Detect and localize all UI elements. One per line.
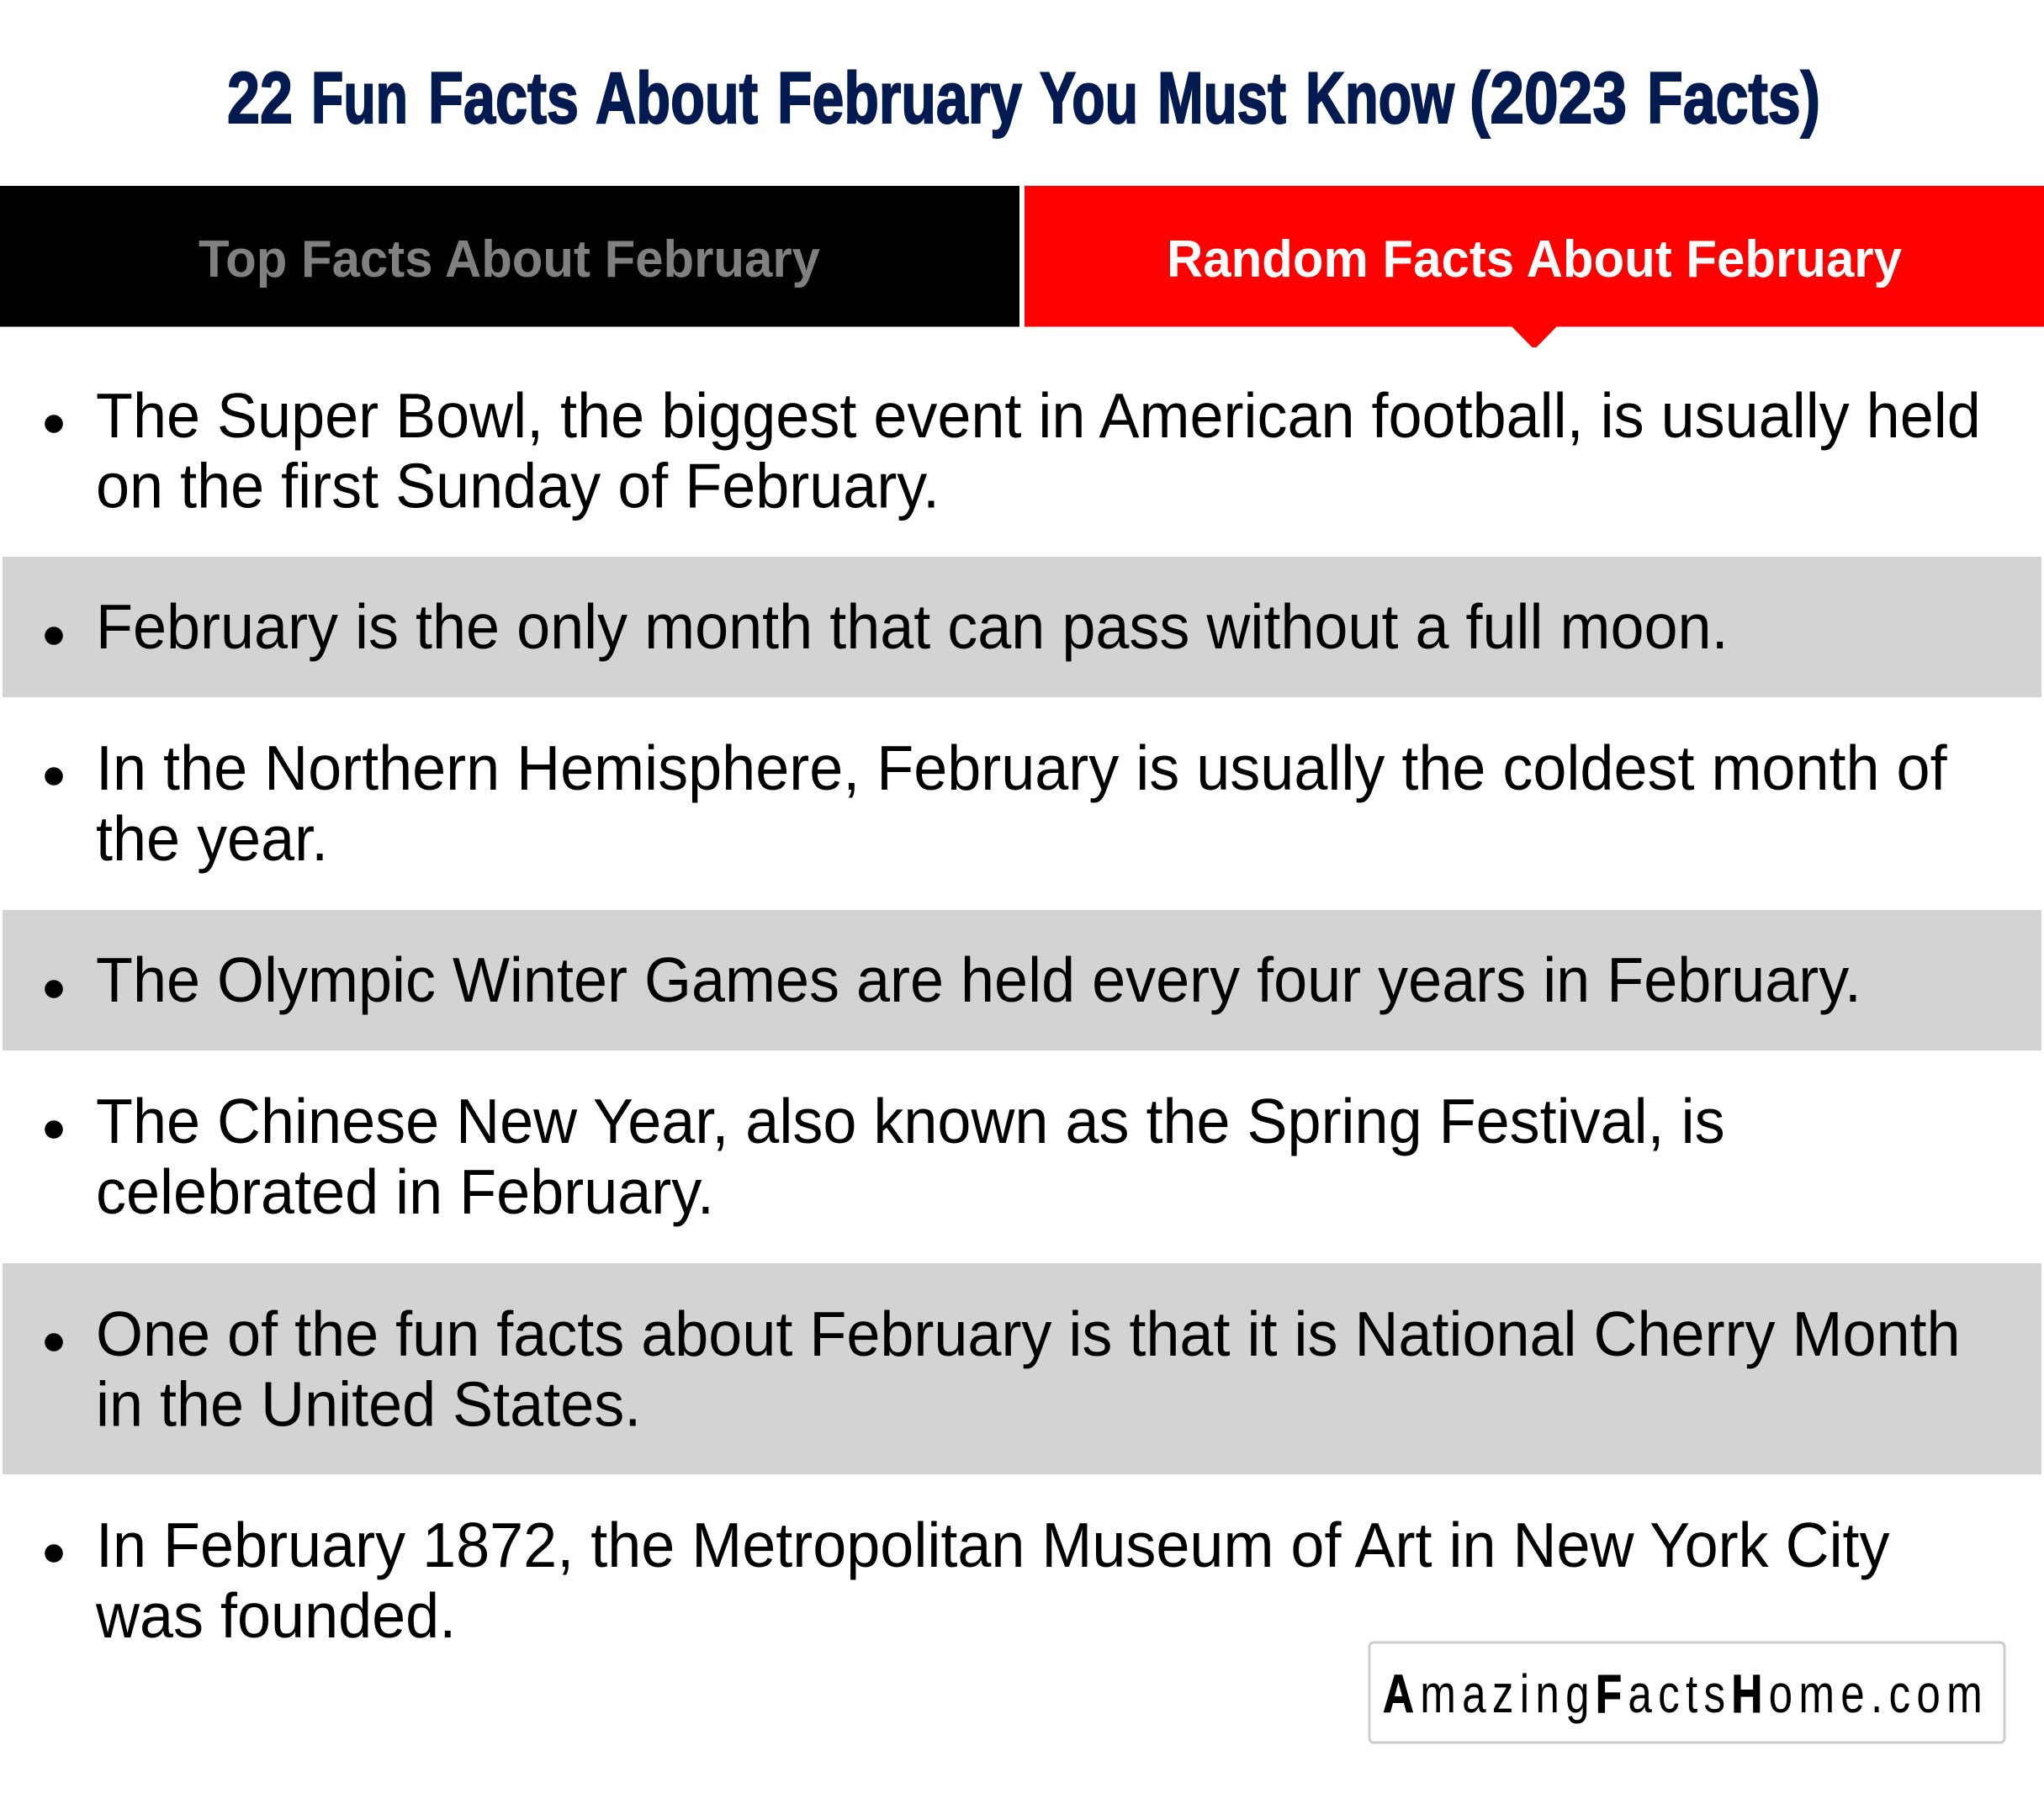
fact row 6: in the United States.: [96, 1369, 641, 1440]
title: Facts: [428, 58, 579, 139]
fact row 4: The Olympic Winter Games are held every four years in February.: [96, 945, 1861, 1015]
fact row 3: [45, 733, 1947, 874]
fact row 6: One of the fun facts about February is that it is National Cherry Month: [96, 1299, 1961, 1369]
fact row 2: February is the only month that can pass without a full moon.: [96, 592, 1729, 662]
title: [227, 58, 1820, 139]
title: February: [777, 58, 1022, 139]
fact row 5: The Chinese New Year, also known as the Spring Festival, is: [96, 1087, 1725, 1156]
title: Must: [1157, 58, 1286, 139]
title: Fun: [311, 58, 408, 139]
watermark badge: [1369, 1642, 2004, 1743]
fact row 3: In the Northern Hemisphere, February is usually the coldest month of: [96, 733, 1947, 803]
title: (2023: [1469, 58, 1627, 139]
tab: random facts (active): Random Facts About February: [1167, 230, 1902, 288]
title: You: [1040, 58, 1138, 139]
fact row 4: [3, 910, 2041, 1050]
fact row 1: on the first Sunday of February.: [96, 451, 940, 521]
tab: top facts (inactive): Top Facts About February: [199, 230, 820, 288]
fact row 1: The Super Bowl, the biggest event in American football, is usually held: [96, 381, 1981, 451]
tab: random facts (active): [1025, 186, 2044, 347]
fact row 3: the year.: [96, 804, 328, 874]
fact row 7: [45, 1510, 1890, 1651]
fact row 6: [3, 1263, 2041, 1474]
title: Know: [1305, 58, 1455, 139]
fact row 5: [45, 1087, 1725, 1227]
tab: top facts (inactive): [0, 186, 1019, 326]
title: About: [596, 58, 758, 139]
fact row 5: celebrated in February.: [96, 1157, 714, 1227]
fact row 1: [45, 381, 1981, 521]
watermark badge: AmazingFactsHome.com: [1383, 1665, 1983, 1724]
title: Facts): [1647, 58, 1820, 139]
title: 22: [227, 58, 293, 139]
fact row 7: In February 1872, the Metropolitan Museum of Art in New York City: [96, 1510, 1890, 1580]
fact row 7: was founded.: [95, 1581, 456, 1651]
fact row 2: [3, 557, 2041, 697]
